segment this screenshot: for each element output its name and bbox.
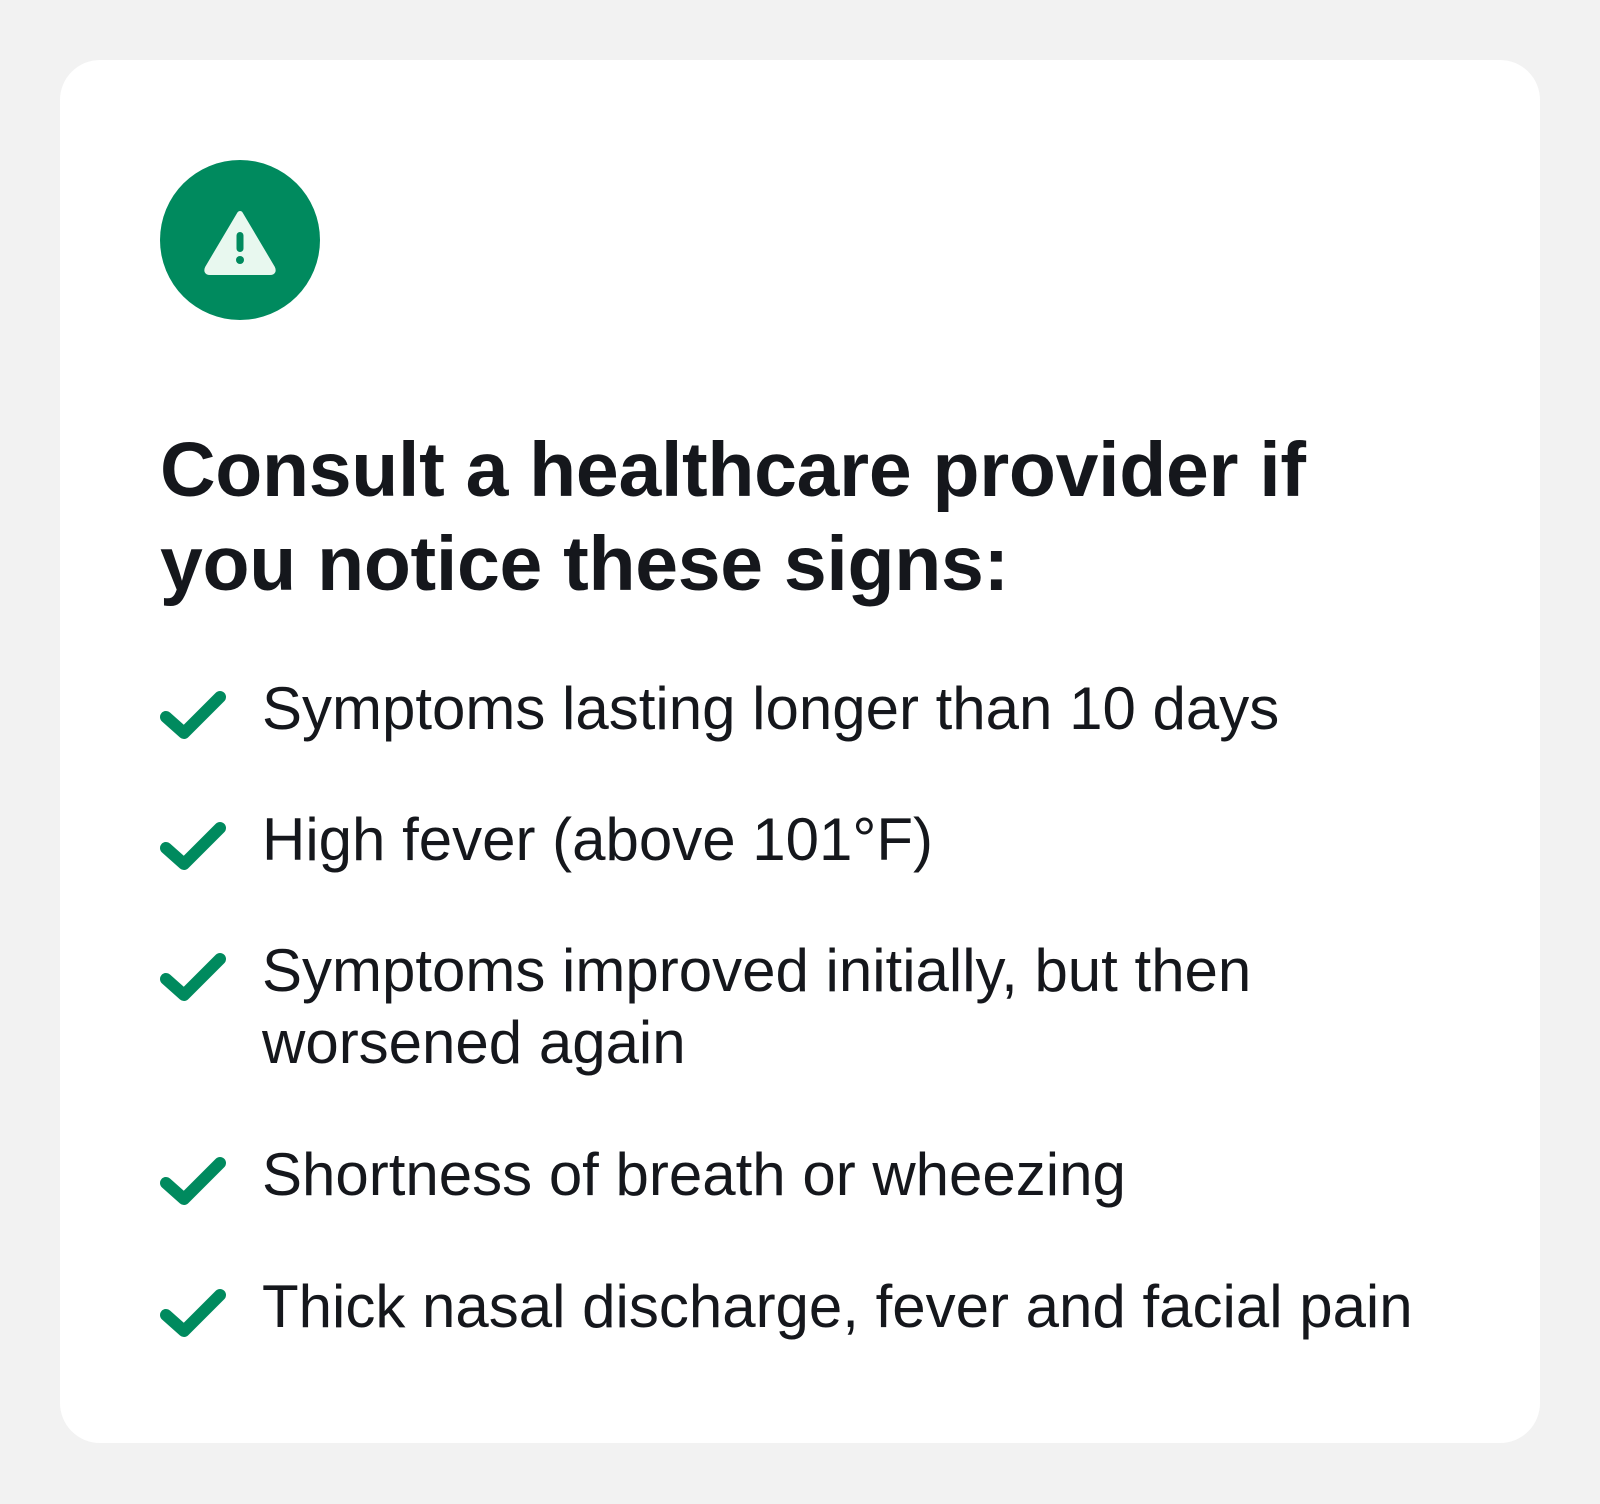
list item 5: Thick nasal discharge, fever and facial pain	[262, 1273, 1413, 1340]
title: Consult a healthcare provider if	[160, 427, 1306, 513]
list item 2: High fever (above 101°F)	[262, 806, 933, 873]
title	[160, 427, 1306, 607]
list item 3: worsened again	[262, 1009, 686, 1076]
title: you notice these signs:	[160, 521, 1009, 607]
list item 3: Symptoms improved initially, but then	[262, 937, 1251, 1004]
list item 3	[160, 937, 1251, 1076]
list item 1: Symptoms lasting longer than 10 days	[262, 675, 1279, 742]
icon: warning circle	[160, 160, 320, 320]
list item 4: Shortness of breath or wheezing	[262, 1141, 1126, 1208]
